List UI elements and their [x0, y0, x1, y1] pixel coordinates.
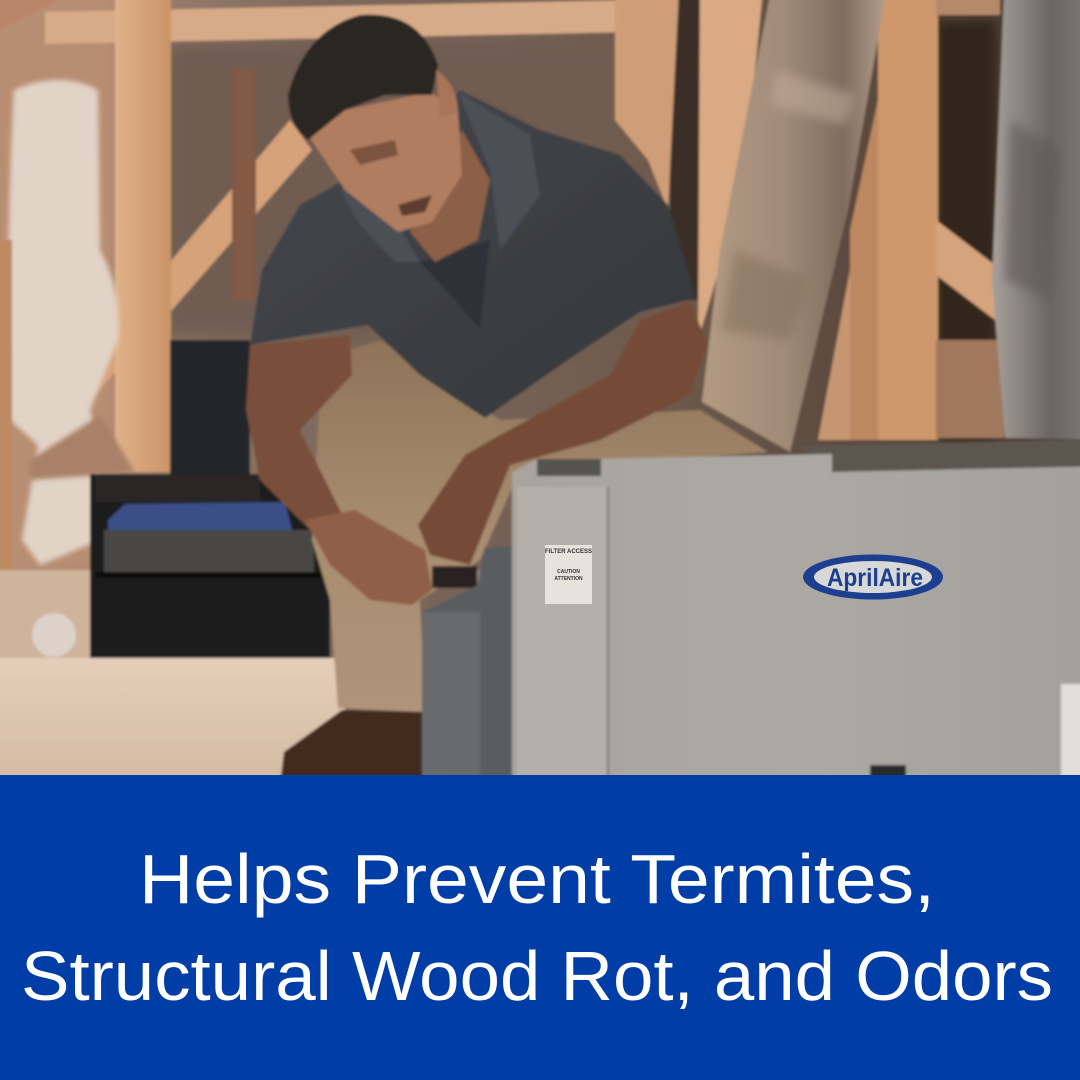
- latch: [537, 459, 601, 476]
- shoe: [278, 710, 424, 800]
- head: [308, 92, 462, 232]
- trousers: [312, 340, 768, 712]
- dark bag and tool case: [90, 340, 330, 662]
- caption heading line 1: Helps Prevent Termites,: [139, 840, 935, 918]
- technician: [246, 15, 768, 800]
- warning labels: [1061, 684, 1080, 800]
- left arm: [246, 335, 352, 530]
- caption banner: [0, 775, 1080, 1080]
- foil-wrapped duct, centre: [702, 0, 890, 452]
- hair: [288, 15, 438, 140]
- photo: technician servicing a dehumidifier in an attic: [0, 0, 1080, 810]
- insulation on the left wall: [0, 80, 135, 570]
- filter door: [517, 487, 608, 800]
- cabinet body: [512, 454, 1080, 800]
- filter access label: CAUTION: [557, 569, 580, 575]
- right arm on knee: [418, 302, 708, 565]
- screwdriver: [432, 566, 509, 588]
- AprilAire logo: AprilAire: [827, 564, 923, 592]
- wooden beams: [0, 0, 1004, 472]
- foil-wrapped duct, right: [992, 0, 1080, 440]
- shirt collar: [458, 92, 540, 250]
- caption heading line 2: Structural Wood Rot, and Odors: [21, 937, 1053, 1015]
- filter access label: ATTENTION: [554, 576, 583, 582]
- left hand: [305, 510, 432, 605]
- shirt: [250, 90, 696, 418]
- dehumidifier: [422, 439, 1080, 800]
- back floor and ball: [0, 570, 90, 662]
- AprilAire logo: [803, 554, 943, 600]
- filter access label: FILTER ACCESS: [545, 549, 592, 555]
- neck: [410, 130, 490, 262]
- top cover: [800, 439, 1080, 472]
- attic background: [0, 0, 1080, 810]
- round duct collar: [422, 545, 518, 800]
- ear: [436, 70, 458, 118]
- filter access label: [545, 545, 592, 604]
- attic floor: [0, 658, 345, 808]
